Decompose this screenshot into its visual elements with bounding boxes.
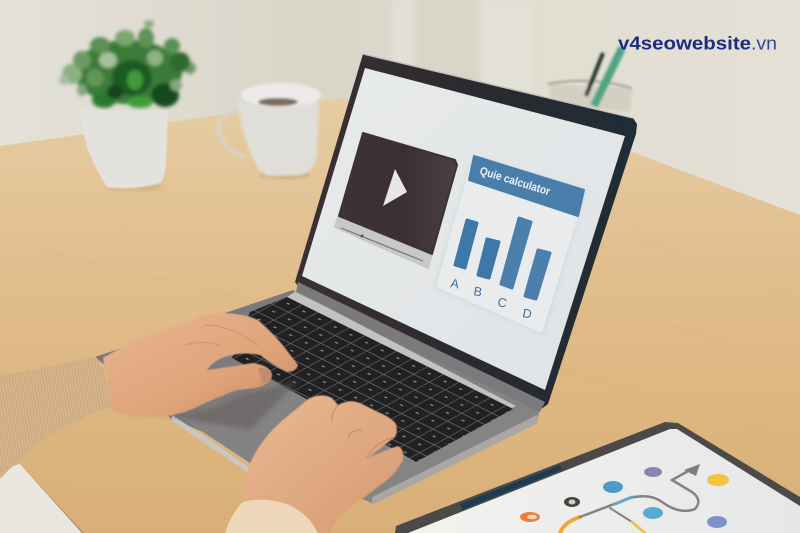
coffee cup [218, 83, 321, 179]
laptop [95, 54, 637, 505]
plant leaves [59, 20, 196, 108]
left hand [103, 313, 298, 417]
chart axis labels [449, 276, 533, 322]
chart axis labels: A [449, 276, 461, 292]
left sleeve [0, 357, 112, 479]
right hand [243, 395, 403, 533]
card header [469, 156, 584, 216]
chart axis labels: C [496, 295, 508, 311]
quiz calculator card [434, 155, 586, 335]
card header: Quie calculator [478, 165, 552, 198]
hinge band [296, 282, 545, 412]
bar chart [455, 218, 550, 299]
trackpad [180, 383, 307, 463]
laptop base deck [95, 290, 540, 505]
pot [80, 108, 168, 188]
hand shadow [120, 380, 300, 430]
video player [335, 133, 457, 268]
plant in white pot [59, 20, 196, 191]
pencil holder [548, 48, 632, 112]
right sleeve [225, 500, 318, 533]
chart axis labels: D [521, 306, 533, 322]
tablet icons [520, 467, 729, 528]
logo: v4seowebsite [618, 34, 751, 54]
chart axis labels: B [472, 284, 483, 299]
laptop screen bezel [295, 54, 637, 410]
screen panel [302, 68, 625, 390]
tablet [395, 422, 800, 533]
tablet flow path [560, 464, 700, 533]
logo: .vn [751, 34, 777, 54]
wall background [0, 0, 800, 230]
play icon [383, 169, 407, 206]
floor corner [0, 464, 82, 533]
keyboard [232, 297, 513, 462]
